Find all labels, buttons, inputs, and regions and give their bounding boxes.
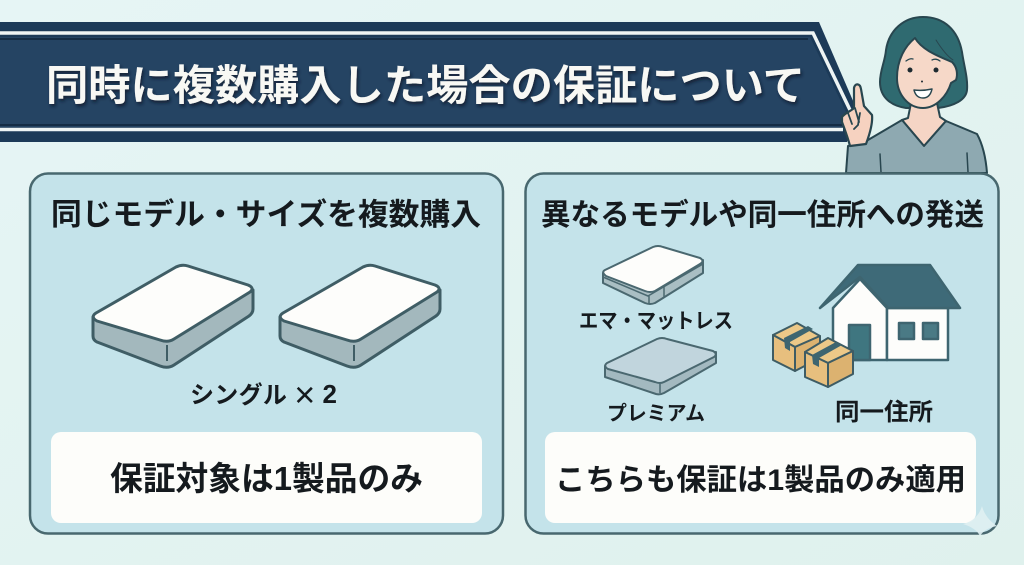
- icon: cardboard boxes: [773, 323, 853, 387]
- callout: warranty one product: 保証対象は1製品のみ: [110, 460, 423, 497]
- label: Premium: プレミアム: [607, 402, 705, 425]
- eyes and eyebrows: [906, 59, 940, 82]
- hair strands: [936, 40, 953, 60]
- label: single x 2: シングル: [190, 382, 287, 409]
- label: same address: 同一住所: [835, 399, 933, 426]
- icon: mattress 2: [280, 265, 440, 367]
- icon: house: [820, 265, 960, 360]
- callout: warranty one product applies: こちらも保証は1製品のみ適用: [555, 464, 966, 497]
- neck: [902, 103, 946, 146]
- hair: [880, 17, 967, 108]
- icon: sparkle watermark: [963, 506, 997, 536]
- icon: mattress 1: [93, 265, 253, 367]
- icon: Premium mattress: [605, 338, 716, 394]
- heading: 同じモデル・サイズを複数購入: [51, 197, 481, 232]
- face: [897, 38, 957, 108]
- title text: 同時に複数購入した場合の保証について: [46, 62, 805, 109]
- panel: different models or same address: [526, 174, 998, 534]
- sweater: [846, 120, 987, 173]
- heading: 異なるモデルや同一住所への発送: [541, 198, 984, 232]
- icon: Emma mattress: [603, 246, 703, 304]
- illustration: woman pointing up: [842, 17, 987, 173]
- callout: warranty one product: [51, 432, 482, 523]
- mouth: [914, 89, 932, 98]
- panel: same model and size: [30, 174, 503, 534]
- label: Emma mattress: エマ・マットレス: [579, 310, 733, 333]
- label: single x 2: 2: [323, 379, 337, 409]
- title banner: [0, 22, 857, 142]
- hand with raised finger: [842, 84, 872, 146]
- label: single x 2: ×: [294, 374, 315, 415]
- callout: warranty one product applies: [545, 432, 976, 523]
